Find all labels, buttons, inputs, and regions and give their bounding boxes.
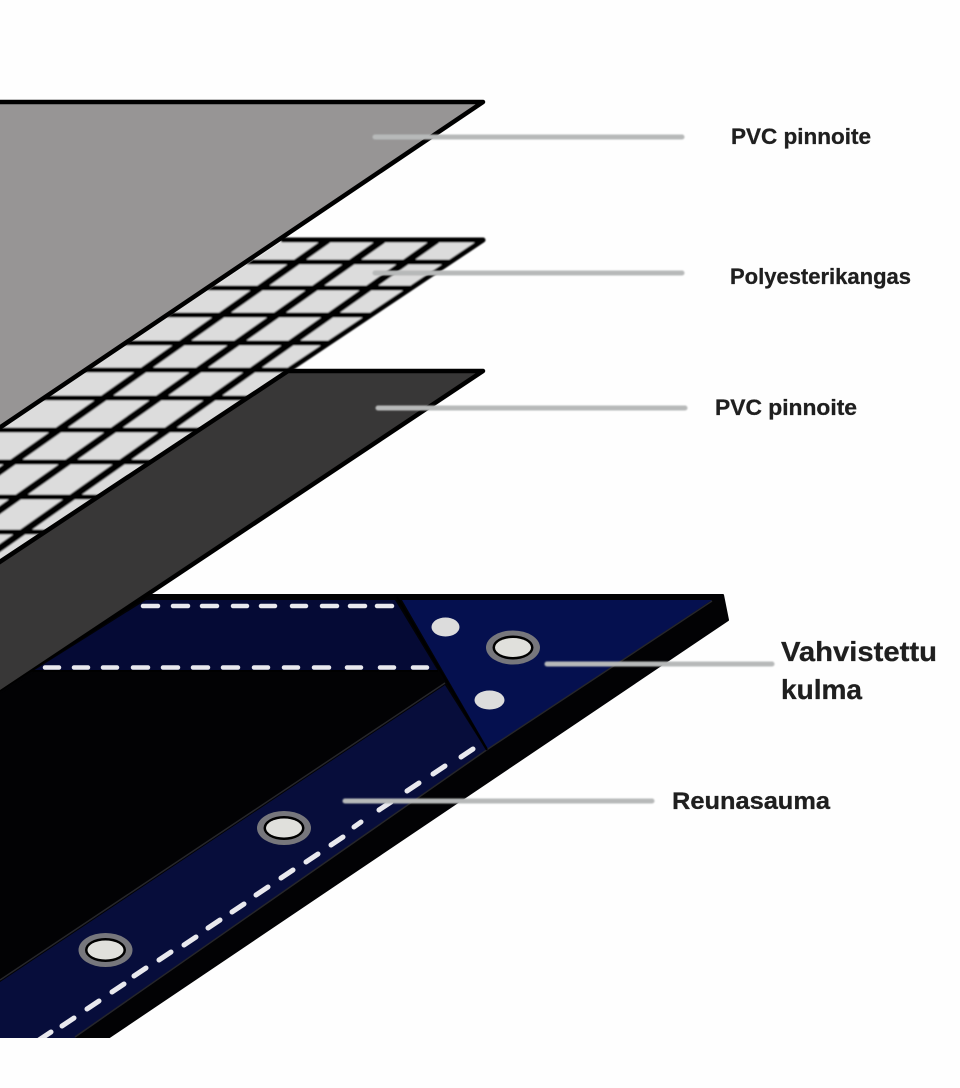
- label: top PVC coating: PVC pinnoite: [731, 124, 871, 149]
- leader line: reinforced corner: [547, 662, 772, 666]
- label: edge seam: Reunasauma: [672, 788, 831, 815]
- layer: reinforced bottom tarpaulin: [0, 595, 728, 1040]
- reinforced corner patch: [402, 600, 712, 749]
- leader line: top PVC coating: [375, 134, 682, 140]
- side grommet lower: [78, 933, 132, 967]
- leader line: polyester fabric: [375, 270, 682, 276]
- side hem stitching: [354, 749, 473, 827]
- corner small eyelet top: [432, 618, 460, 636]
- top edge hem: [33, 600, 438, 671]
- tarpaulin black base: [0, 595, 728, 1040]
- patch fold lines: [33, 670, 488, 750]
- label: lower PVC coating: PVC pinnoite: [715, 395, 857, 420]
- layer: top PVC coating: [0, 102, 483, 441]
- label: polyester fabric: Polyesterikangas: [730, 264, 911, 289]
- label: reinforced corner: kulma: [781, 674, 862, 705]
- leader line: lower PVC coating: [378, 406, 685, 410]
- hem outlines: [0, 601, 712, 1037]
- side edge hem: [0, 685, 486, 1038]
- label: reinforced corner: Vahvistettu: [781, 636, 937, 667]
- leader line: edge seam: [345, 798, 652, 804]
- layer: polyester fabric mesh: [0, 240, 500, 575]
- corner small eyelet bottom: [474, 690, 504, 710]
- corner grommet: [486, 630, 540, 664]
- layer: lower PVC coating: [0, 371, 483, 706]
- top hem stitching: [45, 606, 427, 668]
- side grommet upper: [257, 811, 311, 845]
